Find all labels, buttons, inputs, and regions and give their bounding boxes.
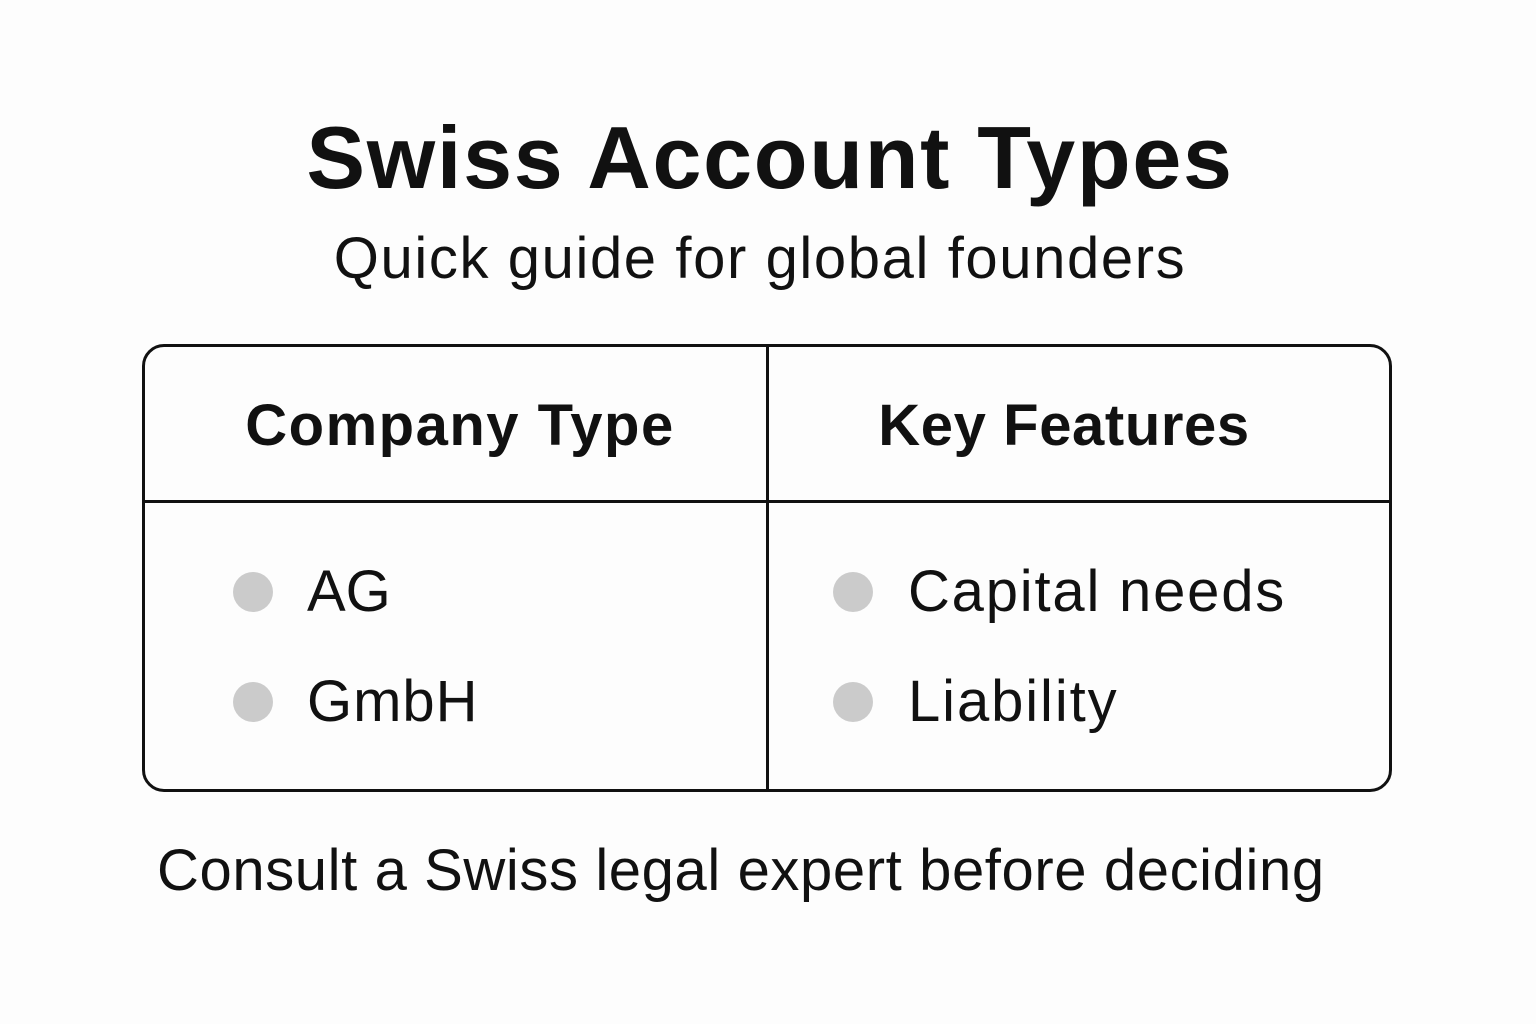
item: GmbH [233, 669, 479, 734]
header divider [145, 500, 1389, 503]
item: capital needs: Capital needs [908, 559, 1286, 624]
header: company type: Company Type [245, 393, 675, 458]
header: key features: Key Features [878, 393, 1250, 458]
item: GmbH: GmbH [307, 669, 479, 734]
title: Swiss Account Types [306, 108, 1234, 207]
item: liability: Liability [908, 669, 1119, 734]
table panel [142, 344, 1392, 792]
column divider [766, 347, 769, 789]
item: AG: AG [307, 559, 391, 624]
footer note: Consult a Swiss legal expert before deciding [157, 838, 1325, 903]
item: AG [233, 559, 391, 624]
subtitle: Quick guide for global founders [334, 226, 1186, 291]
